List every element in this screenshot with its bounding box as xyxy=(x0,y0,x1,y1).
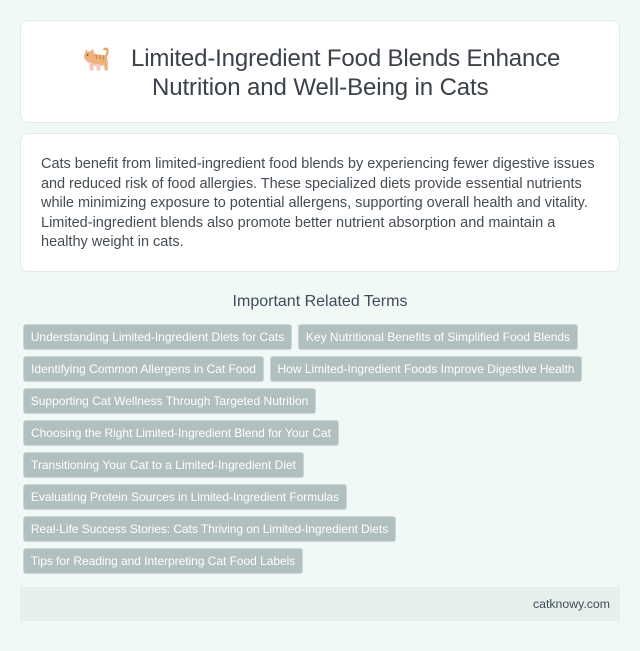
tag xyxy=(23,324,292,350)
footer text: catknowy.com xyxy=(533,597,610,611)
panel: term tags xyxy=(23,324,582,574)
tag: Evaluating Protein Sources in Limited-Ingredient Formulas xyxy=(31,490,339,504)
footer bar xyxy=(20,587,620,621)
tag xyxy=(23,420,339,446)
summary text: healthy weight in cats. xyxy=(41,234,184,250)
summary text: Cats benefit from limited-ingredient food blends by experiencing fewer digestive issues xyxy=(41,156,595,172)
summary text: and reduced risk of food allergies. These specialized diets provide essential nutrients xyxy=(41,176,582,192)
heading: related terms: Important Related Terms xyxy=(233,293,407,310)
tag xyxy=(23,516,396,542)
icon: cat xyxy=(84,48,108,70)
title line 2: Nutrition and Well-Being in Cats xyxy=(152,74,489,101)
tag: Understanding Limited-Ingredient Diets for Cats xyxy=(31,330,284,344)
tag: Key Nutritional Benefits of Simplified Food Blends xyxy=(306,330,570,344)
summary text: while minimizing exposure to potential allergens, supporting overall health and vitality. xyxy=(41,195,588,211)
tag xyxy=(23,388,316,414)
tag xyxy=(298,324,578,350)
tag: How Limited-Ingredient Foods Improve Digestive Health xyxy=(278,362,574,376)
title line 1: Limited-Ingredient Food Blends Enhance xyxy=(131,45,560,72)
tag: Transitioning Your Cat to a Limited-Ingredient Diet xyxy=(31,458,296,472)
tag xyxy=(23,452,304,478)
panel: title card xyxy=(20,20,620,123)
tag xyxy=(23,484,347,510)
tag: Supporting Cat Wellness Through Targeted Nutrition xyxy=(31,394,308,408)
tag: Real-Life Success Stories: Cats Thriving on Limited-Ingredient Diets xyxy=(31,522,388,536)
tag xyxy=(23,548,303,574)
summary text: Limited-ingredient blends also promote better nutrient absorption and maintain a xyxy=(41,214,555,230)
tag: Tips for Reading and Interpreting Cat Food Labels xyxy=(31,554,295,568)
summary text xyxy=(41,156,595,250)
tag: Identifying Common Allergens in Cat Food xyxy=(31,362,256,376)
tag: Choosing the Right Limited-Ingredient Blend for Your Cat xyxy=(31,426,331,440)
tag xyxy=(270,356,582,382)
tag xyxy=(23,356,264,382)
panel: summary card xyxy=(20,133,620,272)
